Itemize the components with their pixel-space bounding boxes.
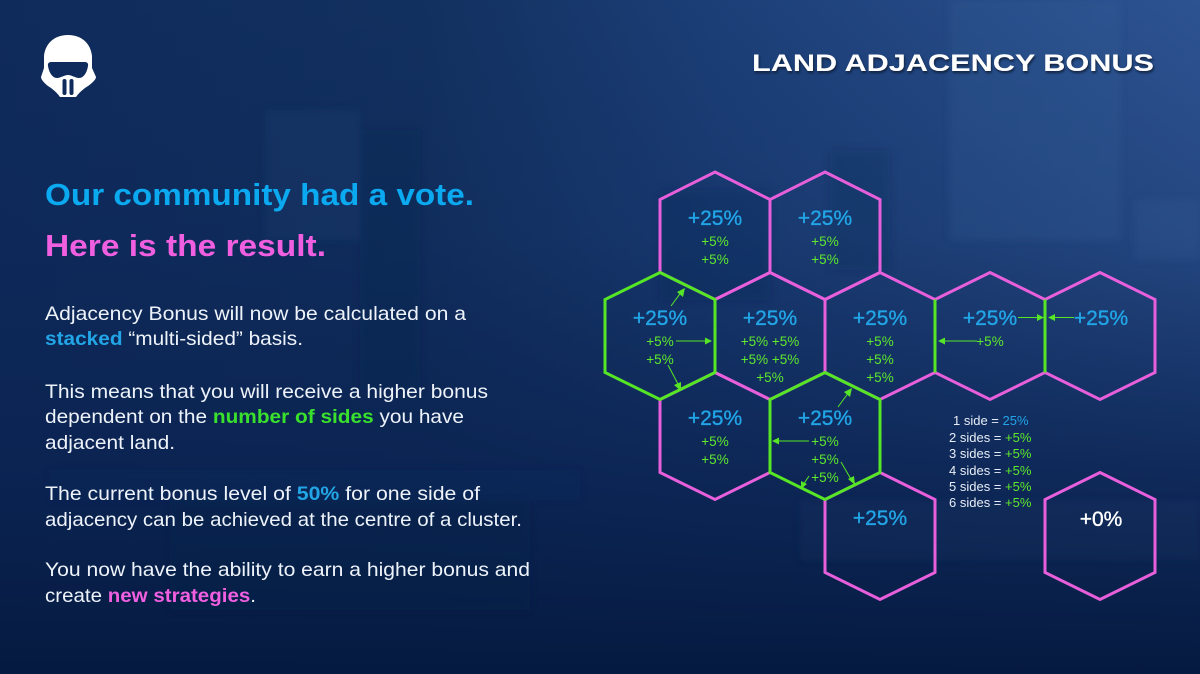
hex: isolated zero bonus: +0%	[1080, 508, 1122, 531]
hex: second row centre-left: +5% +5%	[741, 334, 799, 349]
legend: bonus per side: 1 side = 25%	[953, 413, 1029, 428]
hex: green highlighted centre: +5%	[811, 434, 839, 449]
hex: second row centre: +25%	[853, 307, 907, 330]
hex: third row left: +25%	[688, 407, 742, 430]
hex: green highlighted centre: +25%	[798, 407, 852, 430]
text block: new strategies paragraph	[45, 559, 530, 607]
hex: top row right	[770, 172, 880, 300]
text block: new strategies paragraph: create new strategies .	[45, 585, 256, 607]
heading: community vote: Our community had a vote.	[45, 177, 474, 212]
text block: current bonus paragraph: adjacency can be achieved at the centre of a cluster.	[45, 509, 522, 531]
hex: second row centre: +5%	[866, 334, 894, 349]
hex: bottom middle	[825, 472, 935, 600]
hex: second row centre-left	[715, 272, 825, 400]
hex: green highlighted left	[605, 272, 715, 400]
hex: second row centre-left: +5%	[756, 370, 784, 385]
hex: green highlighted centre	[770, 372, 880, 500]
hex: isolated zero bonus	[1045, 472, 1155, 600]
legend: bonus per side: 6 sides = +5%	[949, 495, 1032, 510]
hex: far right	[1045, 272, 1155, 400]
hex: bottom middle: +25%	[853, 507, 907, 530]
hex: green highlighted centre: +5%	[811, 470, 839, 485]
text block: intro paragraph	[45, 303, 466, 350]
hex: top row left: +25%	[688, 207, 742, 230]
hex: third row left	[660, 372, 770, 500]
text block: new strategies paragraph: You now have the ability to earn a higher bonus and	[45, 559, 530, 581]
hex: far right: +25%	[1074, 307, 1128, 330]
legend: bonus per side: 2 sides = +5%	[949, 430, 1032, 445]
hex: second row centre-left: +25%	[743, 307, 797, 330]
hex: top row right: +5%	[811, 234, 839, 249]
hex: second row centre: +5%	[866, 352, 894, 367]
text block: number of sides paragraph: adjacent land.	[45, 432, 175, 454]
hex: second row right, green sides: +5%	[976, 334, 1004, 349]
hex: second row right, green sides	[935, 272, 1045, 400]
hex: top row left: +5%	[701, 252, 729, 267]
text block: number of sides paragraph: This means that you will receive a higher bonus	[45, 381, 488, 403]
hex: second row centre	[825, 272, 935, 400]
text block: number of sides paragraph: dependent on the number of sides you have	[45, 406, 464, 428]
hex: green highlighted centre: +5%	[811, 452, 839, 467]
hex: top row right: +25%	[798, 207, 852, 230]
hex: second row centre-left: +5% +5%	[741, 352, 799, 367]
hex: third row left: +5%	[701, 434, 729, 449]
text block: intro paragraph: Adjacency Bonus will now be calculated on a	[45, 303, 466, 325]
legend: bonus per side: 5 sides = +5%	[949, 479, 1032, 494]
hex: top row left	[660, 172, 770, 300]
hex: green highlighted left: +25%	[633, 307, 687, 330]
text block: current bonus paragraph	[45, 483, 522, 531]
hex: top row right: +5%	[811, 252, 839, 267]
text block: current bonus paragraph: The current bonus level of 50% for one side of	[45, 483, 481, 505]
legend: bonus per side	[949, 413, 1032, 510]
hexagon diagram	[605, 172, 1155, 600]
title: Land Adjacency Bonus: LAND ADJACENCY BONUS	[752, 50, 1154, 77]
legend: bonus per side: 3 sides = +5%	[949, 446, 1032, 461]
legend: bonus per side: 4 sides = +5%	[949, 463, 1032, 478]
hex: top row left: +5%	[701, 234, 729, 249]
hex: green highlighted left: +5%	[646, 352, 674, 367]
hex: third row left: +5%	[701, 452, 729, 467]
hex: second row right, green sides: +25%	[963, 307, 1017, 330]
heading: the result: Here is the result.	[45, 228, 326, 263]
hex: second row centre: +5%	[866, 370, 894, 385]
logo: white helmet icon	[41, 35, 96, 97]
hex: green highlighted left: +5%	[646, 334, 674, 349]
text block: intro paragraph: stacked “multi-sided” basis.	[45, 328, 303, 350]
text block: number of sides paragraph	[45, 381, 488, 454]
